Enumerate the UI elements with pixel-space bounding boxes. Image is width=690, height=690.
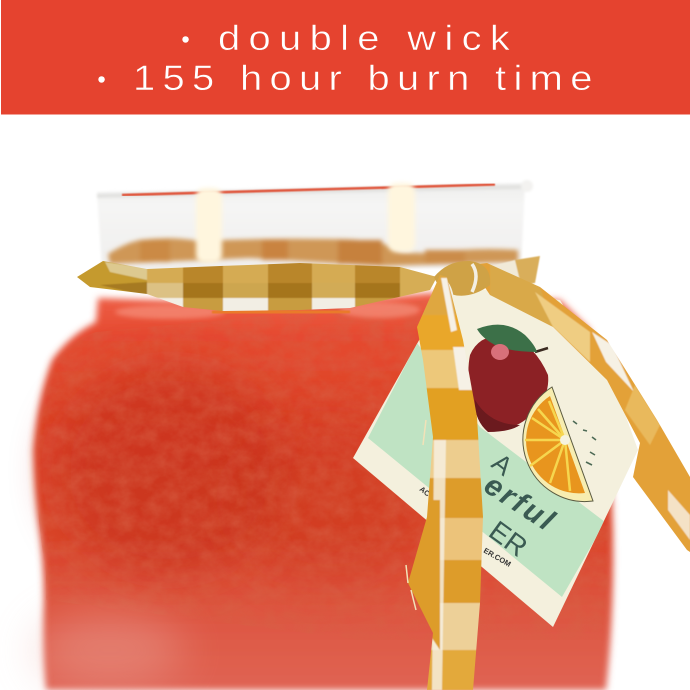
ribbon hanging down bbox=[408, 275, 483, 690]
apple bbox=[468, 335, 548, 432]
frayed lump bbox=[414, 500, 440, 650]
banner text: double wick: double wick bbox=[218, 18, 510, 57]
gingham bottom row bbox=[147, 298, 355, 312]
apple highlight bbox=[491, 344, 509, 360]
tag lettering bbox=[419, 456, 558, 567]
tag lettering: ER.COM bbox=[482, 546, 512, 569]
ribbon knot bbox=[434, 261, 490, 296]
banner bbox=[1, 0, 690, 114]
left ribbon tip bbox=[77, 261, 148, 292]
tag lettering: erful bbox=[478, 468, 560, 538]
tag lettering: A bbox=[486, 447, 519, 482]
wax line at rim bbox=[122, 184, 495, 195]
frayed ribbon threads bbox=[406, 420, 426, 610]
banner text: double wick: • bbox=[181, 24, 190, 54]
sparkle marks bbox=[573, 421, 596, 465]
flame glow left bbox=[196, 188, 222, 263]
banner text: 155 hour burn time: 155 hour burn time bbox=[133, 58, 592, 97]
hang tag bbox=[353, 285, 638, 627]
apple leaf bbox=[477, 325, 537, 352]
ribbon tail behind knot bbox=[494, 255, 541, 284]
caramel residue band bbox=[108, 238, 518, 266]
wax body bbox=[33, 293, 613, 690]
orange slice bbox=[523, 387, 593, 502]
orange rim below ribbon bbox=[212, 311, 350, 313]
candle jar bbox=[33, 180, 690, 690]
pale lower-left wax bbox=[35, 612, 185, 688]
flame glow right bbox=[388, 183, 415, 252]
tag lettering: ER bbox=[483, 515, 533, 563]
cream checks bbox=[490, 262, 553, 327]
tag lettering: AC bbox=[418, 484, 432, 499]
hanging gingham rows bbox=[417, 315, 483, 651]
mint band bbox=[368, 343, 605, 597]
gingham dark columns bbox=[182, 263, 400, 284]
banner text: 155 hour burn time: • bbox=[97, 64, 106, 94]
pale top highlight bbox=[115, 305, 225, 319]
hanging gingham white stripes bbox=[432, 278, 472, 690]
gingham middle row bbox=[183, 283, 400, 298]
ribbon band around neck bbox=[77, 261, 436, 311]
ribbon running right bbox=[480, 263, 690, 552]
glass neck bbox=[97, 180, 533, 270]
